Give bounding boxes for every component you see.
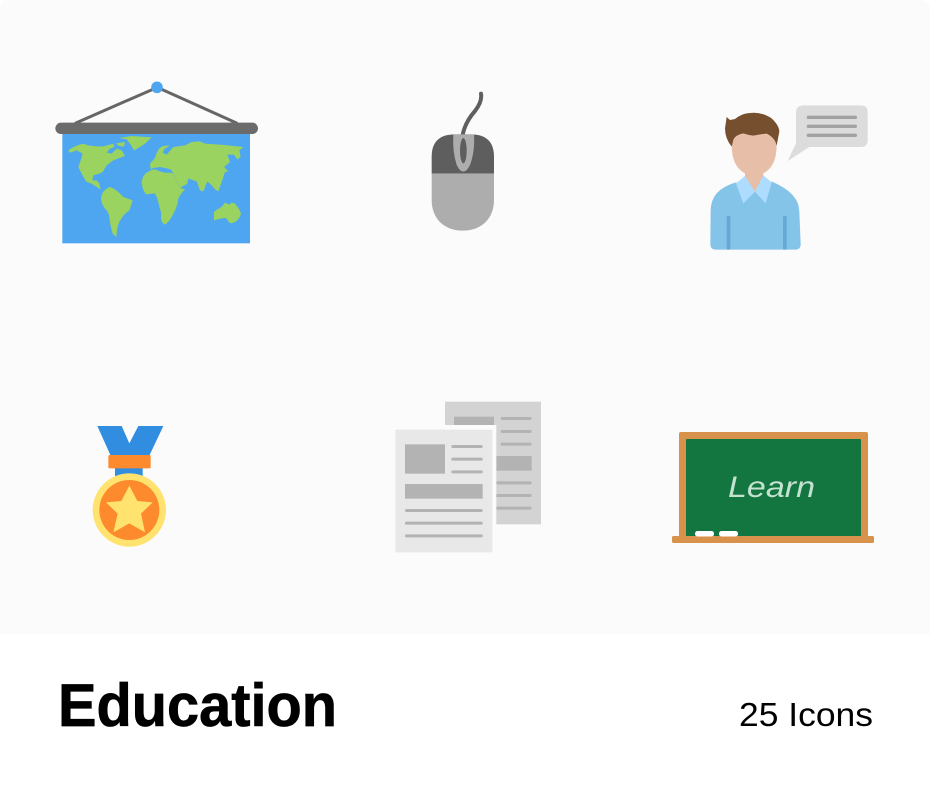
icon: world map bbox=[55, 81, 258, 243]
icon: person with speech bubble bbox=[710, 105, 868, 250]
front page bbox=[395, 430, 492, 552]
icon: computer mouse bbox=[432, 94, 494, 231]
icon count: 25 Icons bbox=[739, 696, 873, 733]
icon: medal bbox=[93, 426, 166, 547]
speech bubble bbox=[788, 105, 868, 161]
back page bbox=[445, 402, 541, 524]
icon: documents bbox=[395, 402, 541, 552]
body bbox=[710, 182, 801, 250]
icon: chalkboard bbox=[672, 432, 874, 543]
head with hair and collar bbox=[725, 113, 779, 203]
title: Education bbox=[58, 672, 337, 739]
chalk text: Learn bbox=[728, 471, 815, 504]
